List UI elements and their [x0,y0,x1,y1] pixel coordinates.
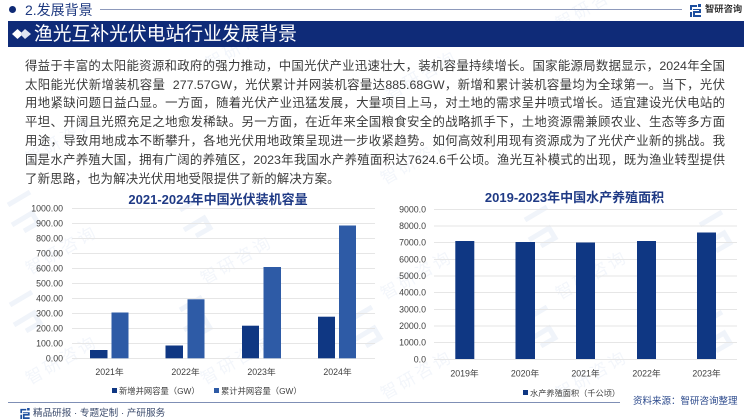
section header [9,2,742,18]
chart: 2021-2024 PV installed capacity [31,192,375,396]
y axis labels right: 1000.0 [399,338,426,348]
legend left: 新增并网容量（GW） [119,386,200,396]
x axis labels left [95,366,352,377]
y axis labels left: 100.00 [36,338,63,348]
y axis labels right: 4000.0 [399,288,426,298]
x axis labels right: 2022年 [632,368,661,378]
y axis labels left: 600.00 [36,264,63,274]
legend left: 累计并网容量（GW） [221,386,302,396]
x axis labels left: 2021年 [95,366,124,377]
y axis labels left [31,204,63,364]
legend left [112,386,302,396]
text: 智研咨询 [202,17,281,73]
title banner [8,21,744,47]
text: 智研咨询 [378,247,456,303]
footer slogan: 精品研报 · 专题定制 · 产研服务 [33,408,165,419]
body paragraph [25,59,725,186]
y axis labels right: 8000.0 [399,221,426,231]
y axis labels left: 500.00 [36,278,63,288]
text: 智研咨询 [22,112,101,168]
x axis labels right: 2020年 [511,368,539,378]
x axis labels left: 2024年 [323,366,352,377]
x axis labels right: 2023年 [692,368,721,378]
aquaculture area bars [455,232,716,359]
text: 智研咨询 [198,332,276,388]
legend right: 水产养殖面积（千公顷） [530,388,620,398]
text: 智研咨询 [22,222,101,278]
text: 智研咨询 [378,347,456,403]
text: 智研咨询 [378,132,456,188]
y axis labels right [399,204,426,364]
banner diamonds icon [12,29,31,39]
text: 智研咨询 [552,247,631,303]
main title: 渔光互补光伏电站行业发展背景 [34,23,297,44]
chart title right: 2019-2023年中国水产养殖面积 [485,190,664,205]
brand name: 智研咨询 [705,4,742,14]
y axis labels left: 700.00 [36,248,63,258]
footer rule [8,402,620,403]
y axis labels right: 7000.0 [399,238,426,248]
footer logo icon [20,408,30,419]
text: 智研咨询 [382,47,461,103]
y axis labels left: 400.00 [36,294,63,304]
body paragraph: 用途，导致用地成本不断攀升，各地光伏用地政策呈现进一步收紧趋势。如何高效利用现有资源成为了光伏产业新的挑战。我 [25,134,725,148]
text: 智研咨询 [552,347,631,403]
body paragraph: 太阳能光伏新增装机容量 277.57GW，光伏累计并网装机容量达885.68GW，新增和累计装机容量均为全球第一。当下，光伏 [25,78,725,92]
y axis labels left: 300.00 [36,308,63,318]
text: 智研咨询 [198,232,276,288]
y axis labels left: 900.00 [36,218,63,228]
body paragraph: 用地紧缺问题日益凸显。一方面，随着光伏产业迅猛发展，大量项目上马，对土地的需求呈井喷式增长。适宜建设光伏电站的 [25,96,725,110]
header rule [100,9,682,10]
y axis labels right: 9000.0 [399,204,426,214]
x axis labels right [450,368,721,378]
y axis labels right: 2000.0 [399,321,426,331]
y axis labels left: 0.00 [46,354,63,364]
body paragraph: 了新思路，也为解决光伏用地受限提供了新的解决方案。 [25,172,340,186]
y axis labels right: 5000.0 [399,271,426,281]
x axis labels left: 2022年 [171,366,200,377]
y axis labels right: 3000.0 [399,304,426,314]
y axis labels right: 6000.0 [399,254,426,264]
section bullet dot [9,6,16,13]
x axis labels left: 2023年 [247,366,276,377]
brand logo icon [690,4,701,17]
y axis labels left: 800.00 [36,234,63,244]
x axis labels right: 2021年 [571,368,600,378]
y axis labels left: 1000.00 [31,204,63,214]
cumulative grid capacity bars [112,226,356,358]
chart: 2019-2023 aquaculture area [399,190,737,398]
source note: 资料来源：智研咨询整理 [633,396,738,407]
x axis labels right: 2019年 [450,368,479,378]
text: 智研咨询 [22,332,101,388]
y axis labels left: 200.00 [36,324,63,334]
chart title left: 2021-2024年中国光伏装机容量 [128,192,308,207]
body paragraph: 平坦、开阔且光照充足之地愈发稀缺。另一方面，在近年来全国粮食安全的战略抓手下，土地资源需兼顾农业、生态等多方面 [25,115,725,129]
y axis labels right: 0.0 [414,354,426,364]
new grid capacity bars [90,317,335,358]
section heading: 2.发展背景 [25,2,93,18]
body paragraph: 国是水产养殖大国，拥有广阔的养殖区，2023年我国水产养殖面积达7624.6千公顷。渔光互补模式的出现，既为渔业转型提供 [25,152,725,166]
body paragraph: 得益于丰富的太阳能资源和政府的强力推动，中国光伏产业迅速壮大，装机容量持续增长。国家能源局数据显示，2024年全国 [25,59,725,73]
